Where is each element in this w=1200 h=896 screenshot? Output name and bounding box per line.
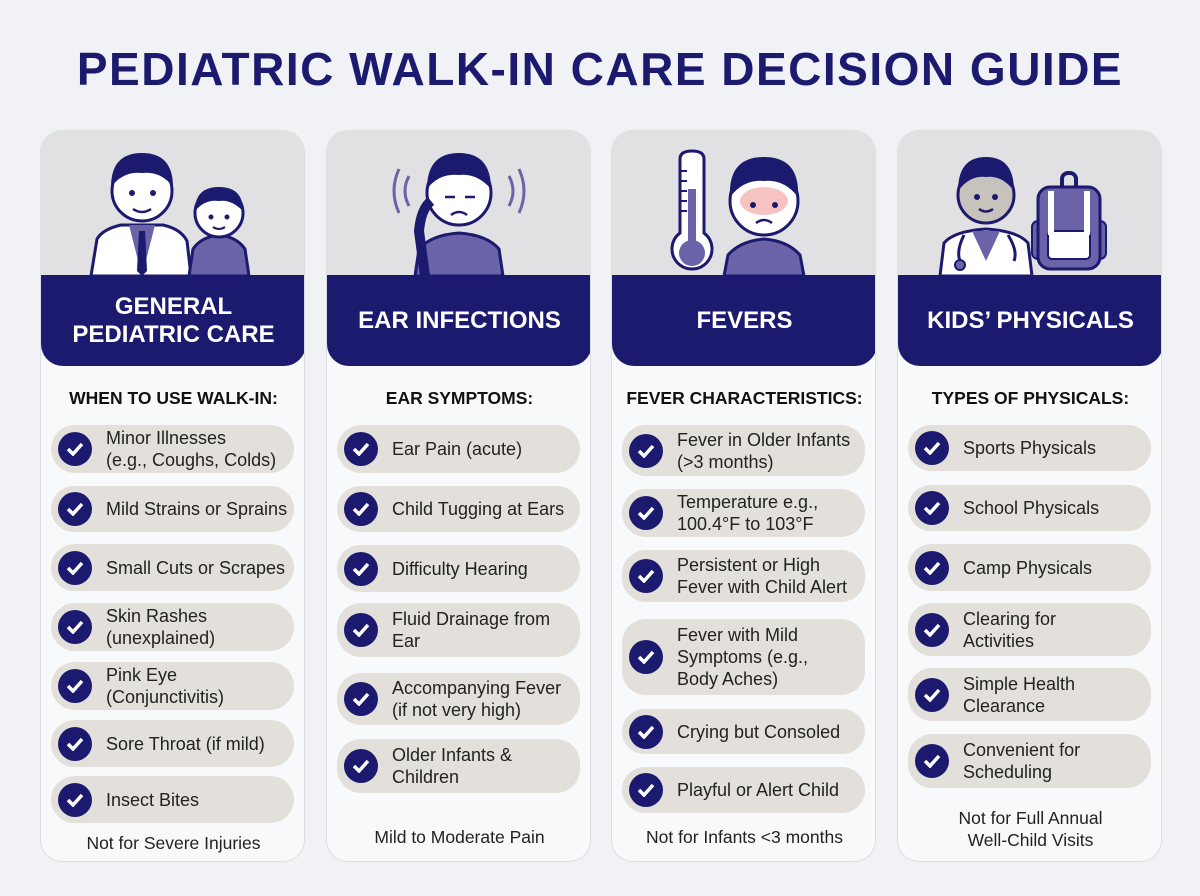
panel: kids' physicals: Activities: [963, 630, 1034, 650]
panel: general pediatric care: Insect Bites: [106, 790, 199, 810]
panel: fevers: Temperature e.g.,: [677, 492, 818, 512]
panel: kids' physicals: Clearing for: [963, 608, 1056, 628]
panel: general pediatric care: (unexplained): [106, 628, 215, 648]
panel: general pediatric care: [40, 130, 305, 862]
panel: general pediatric care: (e.g., Coughs, Colds): [106, 450, 276, 470]
header: KIDS’ PHYSICALS: [927, 306, 1134, 334]
list items: [337, 425, 580, 793]
panel: fevers: 100.4°F to 103°F: [677, 514, 813, 534]
footer note: Not for Infants <3 months: [646, 827, 843, 847]
illustration: thermometer and sick child: [612, 131, 877, 276]
header: GENERAL: [115, 292, 232, 320]
header: EAR INFECTIONS: [358, 306, 561, 334]
list items: [908, 425, 1151, 788]
panel: fevers: Persistent or High: [677, 555, 820, 575]
panel: general pediatric care: Sore Throat (if mild): [106, 734, 265, 754]
panel: fevers: (>3 months): [677, 452, 774, 472]
panel: ear infections: Fluid Drainage from: [392, 609, 550, 629]
panel: general pediatric care: (Conjunctivitis): [106, 687, 224, 707]
panel: kids' physicals: Clearance: [963, 696, 1045, 716]
panel: ear infections: Child Tugging at Ears: [392, 499, 564, 519]
panel: general pediatric care: Minor Illnesses: [106, 428, 226, 448]
panel: fevers: Crying but Consoled: [677, 722, 840, 742]
panel: ear infections: Difficulty Hearing: [392, 558, 528, 578]
panel: general pediatric care: Skin Rashes: [106, 606, 207, 626]
panel: fevers: Symptoms (e.g.,: [677, 647, 808, 667]
illustration: doctor and backpack: [898, 131, 1163, 276]
panel: fevers: Fever with Child Alert: [677, 577, 847, 597]
footer note: Well-Child Visits: [968, 830, 1093, 850]
subheading: TYPES OF PHYSICALS:: [932, 388, 1129, 408]
panel: general pediatric care: Mild Strains or Sprains: [106, 499, 287, 519]
footer note: [959, 808, 1102, 850]
title: PEDIATRIC WALK-IN CARE DECISION GUIDE: [77, 43, 1123, 95]
panel: ear infections: Older Infants &: [392, 745, 512, 765]
illustration: child with ear pain: [327, 131, 592, 276]
panel: kids' physicals: Scheduling: [963, 762, 1052, 782]
header: PEDIATRIC CARE: [72, 320, 275, 348]
panel: kids' physicals: Simple Health: [963, 674, 1075, 694]
subheading: FEVER CHARACTERISTICS:: [626, 388, 863, 408]
panel: ear infections: (if not very high): [392, 700, 521, 720]
panel: ear infections: Ear: [392, 631, 420, 651]
panel: general pediatric care: Pink Eye: [106, 665, 177, 685]
header: [898, 275, 1163, 366]
list items: [622, 425, 865, 813]
panel: kids' physicals: Sports Physicals: [963, 438, 1096, 458]
panel: fevers: [611, 130, 876, 862]
panel: ear infections: Children: [392, 767, 459, 787]
panel: general pediatric care: Small Cuts or Scrapes: [106, 558, 285, 578]
header: FEVERS: [696, 306, 793, 334]
panel: kids' physicals: Convenient for: [963, 740, 1080, 760]
footer note: Not for Full Annual: [959, 808, 1102, 828]
footer note: Mild to Moderate Pain: [374, 827, 545, 847]
illustration: doctor and child: [41, 131, 306, 276]
header: [327, 275, 592, 366]
panel: fevers: Fever in Older Infants: [677, 430, 850, 450]
panel: ear infections: Accompanying Fever: [392, 678, 561, 698]
panel: fevers: Body Aches): [677, 669, 778, 689]
list items: [51, 425, 294, 823]
panel: kids' physicals: School Physicals: [963, 498, 1099, 518]
panel: fevers: Playful or Alert Child: [677, 780, 839, 800]
panel: ear infections: Ear Pain (acute): [392, 439, 522, 459]
panel: ear infections: [326, 130, 591, 862]
header: [612, 275, 877, 366]
panel: kids' physicals: [897, 130, 1162, 862]
header: [41, 275, 306, 366]
subheading: EAR SYMPTOMS:: [386, 388, 533, 408]
footer note: Not for Severe Injuries: [86, 833, 261, 853]
subheading: WHEN TO USE WALK-IN:: [69, 388, 278, 408]
panel: fevers: Fever with Mild: [677, 625, 798, 645]
panel: kids' physicals: Camp Physicals: [963, 558, 1092, 578]
